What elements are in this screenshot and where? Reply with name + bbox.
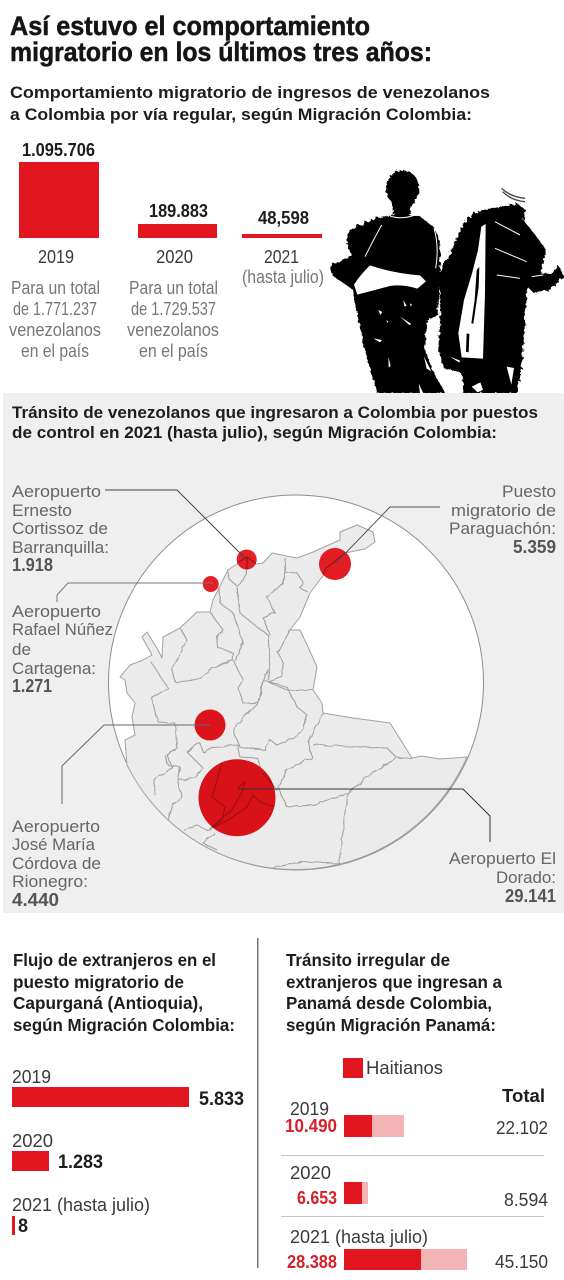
label: Rionegro: 4.440 xyxy=(12,890,59,910)
label: Paraguachón: 5.359 xyxy=(513,537,556,557)
bar 2021 xyxy=(242,208,324,287)
label: Cartagena: de xyxy=(12,640,31,659)
panel: control posts map xyxy=(3,393,564,913)
bubble: Rionegro xyxy=(194,710,226,740)
label: Barranquilla: Cortissoz de xyxy=(12,519,108,538)
leader: El Dorado xyxy=(238,789,490,842)
bar 2020 xyxy=(138,201,217,267)
row 2021 xyxy=(287,1226,548,1272)
heading: Panama: Tránsito irregular de xyxy=(286,950,450,970)
panel: irregular transit to Panama xyxy=(281,950,548,1272)
bar 2020: 2020 xyxy=(156,246,193,267)
heading: Capurganá: Capurganá (Antioquia), xyxy=(13,993,203,1013)
bar 2021: 8 xyxy=(18,1216,28,1237)
label: Rionegro: Rionegro: xyxy=(12,872,88,891)
bar 2021: 2021 xyxy=(264,246,299,267)
row 2019: 10.490 xyxy=(285,1116,337,1136)
note: total 2019: Para un total xyxy=(11,277,100,298)
note: total 2019: en el país xyxy=(21,340,89,361)
bar 2019: 1.095.706 xyxy=(22,140,95,160)
note: total 2020 xyxy=(127,277,219,361)
row 2021: 28.388 xyxy=(287,1252,337,1272)
note: total 2019 xyxy=(9,277,101,361)
bar 2020: 2020 xyxy=(12,1130,53,1151)
label: Rionegro: Córdova de xyxy=(12,854,101,873)
label: El Dorado: Dorado: xyxy=(496,868,556,887)
title: migratorio en los últimos tres años: xyxy=(10,37,432,67)
label: El Dorado: Aeropuerto El xyxy=(449,849,556,868)
label: Cartagena: Aeropuerto xyxy=(12,602,101,621)
row 2020: 8.594 xyxy=(504,1189,548,1210)
bar 2019: 2019 xyxy=(12,1066,51,1087)
note: total 2020: de 1.729.537 xyxy=(131,298,216,319)
note: total 2020: en el país xyxy=(139,340,208,361)
note: total 2019: de 1.771.237 xyxy=(13,298,97,319)
heading: Capurganá: puesto migratorio de xyxy=(13,972,184,992)
label: Barranquilla: Ernesto xyxy=(12,501,72,520)
legend: Haitianos: Haitianos xyxy=(366,1058,443,1078)
illustration: silhouette of two migrants xyxy=(330,170,564,393)
label: Paraguachón: Puesto xyxy=(502,482,556,501)
note: total 2019: venezolanos xyxy=(9,319,101,340)
heading: Capurganá: según Migración Colombia: xyxy=(13,1015,235,1035)
leader: Paraguachón xyxy=(335,507,440,564)
label: Cartagena: 1.271 xyxy=(12,676,52,696)
label: Cartagena xyxy=(12,602,113,696)
title: Así estuvo el comportamiento xyxy=(10,11,370,41)
label: Rionegro: José María xyxy=(12,835,96,854)
bar 2019 xyxy=(12,1066,244,1110)
note: total 2020: Para un total xyxy=(129,277,218,298)
column header: Total: Total xyxy=(502,1086,545,1106)
bubble: Barranquilla xyxy=(237,550,257,570)
label: Paraguachón: migratorio de xyxy=(451,501,556,520)
leader: Barranquilla xyxy=(105,490,246,559)
label: Paraguachón: Paraguachón: xyxy=(449,519,556,538)
label: Barranquilla: Barranquilla: xyxy=(12,538,109,557)
bubble: El Dorado xyxy=(198,759,276,836)
bar 2019: 5.833 xyxy=(199,1089,244,1110)
bar 2019: 2019 xyxy=(38,246,74,267)
label: Paraguachón xyxy=(449,482,556,557)
bar 2021: 48,598 xyxy=(258,208,309,228)
row 2021: 45.150 xyxy=(495,1251,548,1272)
bar 2020: 1.283 xyxy=(58,1152,103,1173)
title xyxy=(10,11,432,67)
subtitle: regular entries xyxy=(10,83,490,124)
heading: Panama xyxy=(286,950,502,1035)
label: El Dorado xyxy=(449,849,556,906)
label: Cartagena: Rafael Núñez xyxy=(12,620,113,639)
leader: Rionegro xyxy=(62,725,210,804)
row 2019: 2019 xyxy=(290,1098,329,1119)
borders seen through bubbles xyxy=(212,553,345,828)
row 2020: 6.653 xyxy=(297,1188,337,1208)
bar 2021 xyxy=(12,1194,150,1237)
leader: Cartagena xyxy=(57,583,213,602)
panel heading xyxy=(12,403,538,442)
row 2020 xyxy=(290,1162,548,1210)
bar chart: regular entries by year xyxy=(19,140,324,287)
subtitle: regular entries: Comportamiento migratorio de ingresos de venezolanos xyxy=(10,83,490,102)
label: Barranquilla xyxy=(12,482,109,575)
bubble: Paraguachón xyxy=(319,548,351,580)
heading: Capurganá: Flujo de extranjeros en el xyxy=(13,950,216,970)
label: Barranquilla: 1.918 xyxy=(12,555,53,575)
row 2021: 2021 (hasta julio) xyxy=(290,1226,428,1247)
heading: Panama: Panamá desde Colombia, xyxy=(286,993,492,1013)
bubble: Cartagena xyxy=(203,576,219,592)
panel: Capurganá flow xyxy=(12,950,244,1237)
divider between lower panels xyxy=(257,938,258,1268)
heading: Panama: extranjeros que ingresan a xyxy=(286,972,502,992)
note: total 2020: venezolanos xyxy=(127,319,219,340)
label: Cartagena: Cartagena: xyxy=(12,659,96,678)
panel heading: de control en 2021 (hasta julio), según Migración Colombia: xyxy=(12,423,497,442)
bar 2020: 189.883 xyxy=(149,201,208,221)
row 2020: 2020 xyxy=(290,1162,331,1183)
panel heading: Tránsito de venezolanos que ingresaron a Colombia por puestos xyxy=(12,403,538,422)
bar 2021: 2021 (hasta julio) xyxy=(12,1194,150,1215)
row 2019 xyxy=(285,1098,548,1138)
heading: Capurganá xyxy=(13,950,235,1035)
row 2019: 22.102 xyxy=(496,1117,548,1138)
label: Rionegro: Aeropuerto xyxy=(12,817,100,836)
map of Colombia in circle xyxy=(108,495,484,870)
label: Barranquilla: Aeropuerto xyxy=(12,482,101,501)
label: Rionegro xyxy=(12,817,101,910)
bar 2021: (hasta julio) xyxy=(242,267,324,287)
bar 2020 xyxy=(12,1130,103,1173)
label: El Dorado: 29.141 xyxy=(505,886,556,906)
subtitle: regular entries: a Colombia por vía regular, según Migración Colombia: xyxy=(10,105,472,124)
bar 2019 xyxy=(19,140,99,267)
heading: Panama: según Migración Panamá: xyxy=(286,1015,496,1035)
